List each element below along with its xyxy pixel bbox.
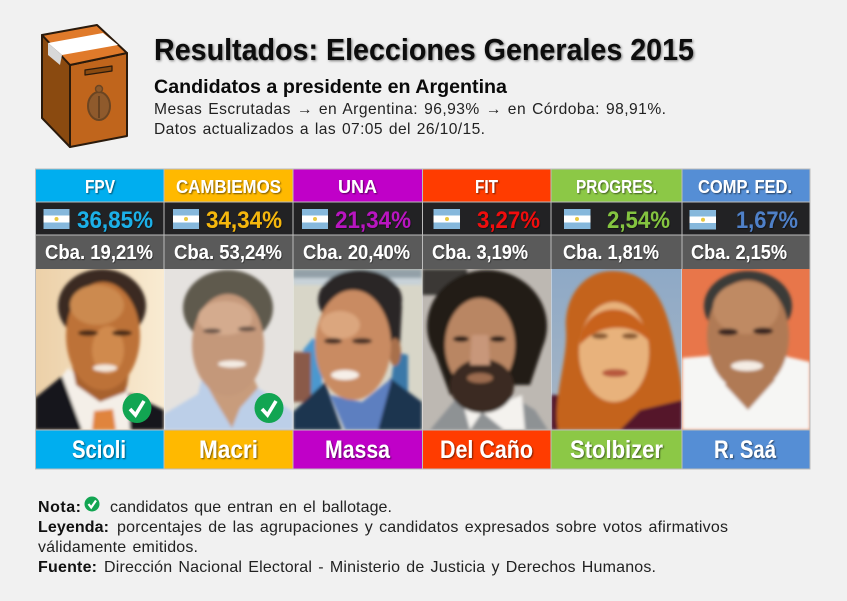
photo: Massa: [293, 269, 422, 430]
candidate name row: Macri: [199, 436, 258, 464]
national percentage row: 36,85%: [77, 207, 153, 234]
party header row: [36, 169, 810, 202]
national percentage row: 3,27%: [477, 207, 540, 234]
party header row: FPV: [85, 177, 115, 197]
party header row: PROGRES.: [576, 177, 657, 197]
legend text: porcentajes de las agrupaciones y candidatos expresados sobre votos afirmativos: [117, 519, 728, 536]
photo: Macri: [164, 269, 293, 430]
note line: [38, 496, 392, 516]
Córdoba percentage row: Cba. 2,15%: [691, 242, 787, 264]
icon: ballot box: [42, 25, 127, 147]
Córdoba percentage row: Cba. 20,40%: [303, 242, 410, 264]
national percentage row: 34,34%: [206, 207, 282, 234]
source line: Fuente:: [38, 559, 97, 576]
icon: check Macri: [254, 393, 284, 423]
table gridlines: [35, 169, 810, 469]
Córdoba percentage row: Cba. 3,19%: [432, 242, 528, 264]
photo: Del Caño: [422, 269, 551, 430]
Córdoba percentage row: Cba. 1,81%: [563, 242, 659, 264]
candidate name row: Massa: [325, 436, 391, 464]
title: Resultados: Elecciones Generales 2015: [154, 32, 694, 67]
photo: R. Saá: [682, 269, 810, 430]
legend text: [38, 519, 728, 556]
candidate name row: [36, 430, 810, 469]
source line: Dirección Nacional Electoral - Ministerio de Justicia y Derechos Humanos.: [104, 559, 656, 576]
Córdoba percentage row: Cba. 53,24%: [174, 242, 282, 264]
party header row: CAMBIEMOS: [176, 177, 281, 197]
candidate name row: R. Saá: [714, 436, 776, 464]
Córdoba percentage row: [36, 235, 810, 269]
candidate name row: Del Caño: [440, 436, 533, 464]
photo: Stolbizer: [551, 269, 682, 430]
subtitle: Candidatos a presidente en Argentina: [154, 77, 507, 98]
national percentage row: 2,54%: [607, 207, 670, 234]
photo: Scioli: [35, 269, 164, 430]
national percentage row: [36, 202, 810, 235]
footnotes: [38, 496, 728, 576]
note line: candidatos que entran en el ballotage.: [110, 499, 392, 516]
note line: Nota:: [38, 499, 81, 516]
icon: check Scioli: [122, 393, 152, 423]
national percentage row: 1,67%: [736, 207, 798, 234]
party header row: UNA: [338, 177, 377, 197]
national percentage row: 21,34%: [335, 207, 411, 234]
legend text: Leyenda:: [38, 519, 109, 536]
candidate name row: Scioli: [72, 436, 126, 464]
text: datos actualizados: Datos actualizados a las 07:05 del 26/10/15.: [154, 121, 485, 138]
legend text: válidamente emitidos.: [38, 539, 198, 556]
results table: [35, 169, 810, 469]
party header row: COMP. FED.: [698, 177, 792, 197]
Córdoba percentage row: Cba. 19,21%: [45, 242, 153, 264]
party header row: FIT: [475, 177, 498, 197]
text: mesas escrutadas: Mesas Escrutadas → en Argentina: 96,93% → en Córdoba: 98,91%.: [154, 101, 666, 118]
candidate name row: Stolbizer: [570, 436, 663, 464]
